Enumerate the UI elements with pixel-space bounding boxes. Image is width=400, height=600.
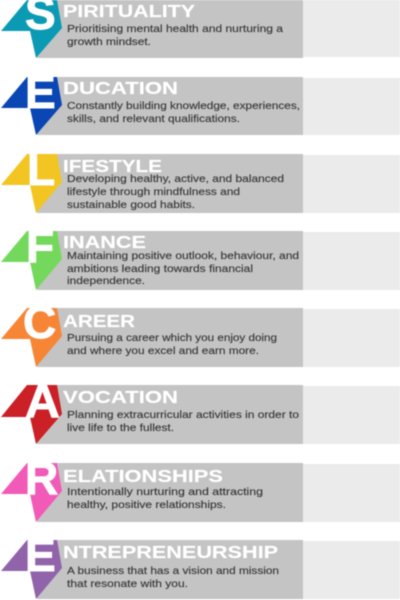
grey bar — [37, 154, 303, 213]
description: Prioritising mental health and nurturing a — [67, 24, 283, 35]
arrow badge — [1, 308, 62, 367]
description: and where you excel and earn more. — [67, 346, 259, 357]
description — [67, 174, 284, 211]
heading: IFESTYLE — [63, 156, 162, 176]
description: Planning extracurricular activities in order to — [67, 410, 299, 421]
light side panel — [303, 386, 400, 444]
description — [67, 410, 299, 434]
row: finance — [1, 220, 400, 290]
row: relationships — [1, 452, 400, 522]
description — [67, 24, 283, 48]
description: A business that has a vision and mission — [67, 566, 279, 577]
arrow badge — [1, 231, 62, 290]
light side panel — [303, 155, 400, 213]
description — [67, 566, 279, 590]
row: avocation — [1, 375, 400, 444]
initial letter R: R — [25, 452, 58, 504]
grey bar — [37, 463, 303, 522]
arrow badge — [1, 154, 62, 213]
description: Pursuing a career which you enjoy doing — [67, 333, 277, 344]
row: entrepreneurship — [1, 529, 400, 599]
initial letter C: C — [23, 296, 56, 348]
description: ambitions leading towards financial — [67, 264, 253, 275]
description: Intentionally nurturing and attracting — [67, 487, 263, 498]
arrow badge — [1, 385, 62, 444]
grey bar — [37, 77, 303, 135]
initial letter E: E — [25, 529, 56, 581]
light side panel — [303, 309, 400, 367]
light side panel — [303, 541, 400, 599]
row: career — [1, 296, 400, 367]
light side panel — [303, 0, 400, 57]
grey bar — [37, 231, 303, 290]
description — [67, 487, 263, 511]
initial letter L: L — [27, 143, 55, 195]
arrow badge — [1, 0, 62, 58]
description — [67, 251, 299, 287]
light side panel — [303, 464, 400, 522]
heading: VOCATION — [63, 387, 178, 407]
heading: INANCE — [63, 232, 146, 252]
initial letter E: E — [25, 66, 56, 118]
description: sustainable good habits. — [67, 200, 195, 211]
arrow badge — [1, 463, 62, 522]
heading: ELATIONSHIPS — [63, 466, 223, 486]
grey bar — [37, 0, 303, 58]
description — [67, 101, 300, 125]
arrow badge — [1, 540, 62, 599]
description: that resonate with you. — [67, 579, 188, 590]
grey bar — [37, 385, 303, 444]
arrow badge — [1, 77, 62, 135]
description — [67, 333, 277, 357]
description: skills, and relevant qualifications. — [67, 114, 240, 125]
description: lifestyle through mindfulness and — [67, 187, 240, 198]
description: Maintaining positive outlook, behaviour, and — [67, 251, 299, 262]
description: healthy, positive relationships. — [67, 500, 226, 511]
description: independence. — [67, 276, 145, 287]
heading: AREER — [63, 311, 135, 331]
heading: DUCATION — [63, 78, 178, 98]
description: Constantly building knowledge, experiences, — [67, 101, 300, 112]
grey bar — [37, 540, 303, 599]
description: growth mindset. — [67, 37, 151, 48]
row: lifestyle — [1, 143, 400, 213]
row: education — [1, 66, 400, 135]
heading: NTREPRENEURSHIP — [63, 542, 278, 562]
grey bar — [37, 308, 303, 367]
description: live life to the fullest. — [67, 423, 174, 434]
light side panel — [303, 232, 400, 290]
light side panel — [303, 78, 400, 135]
initial letter A: A — [25, 375, 60, 427]
description: Developing healthy, active, and balanced — [67, 174, 284, 185]
row: spirituality — [1, 0, 400, 58]
initial letter F: F — [26, 220, 54, 272]
heading: PIRITUALITY — [63, 1, 195, 21]
